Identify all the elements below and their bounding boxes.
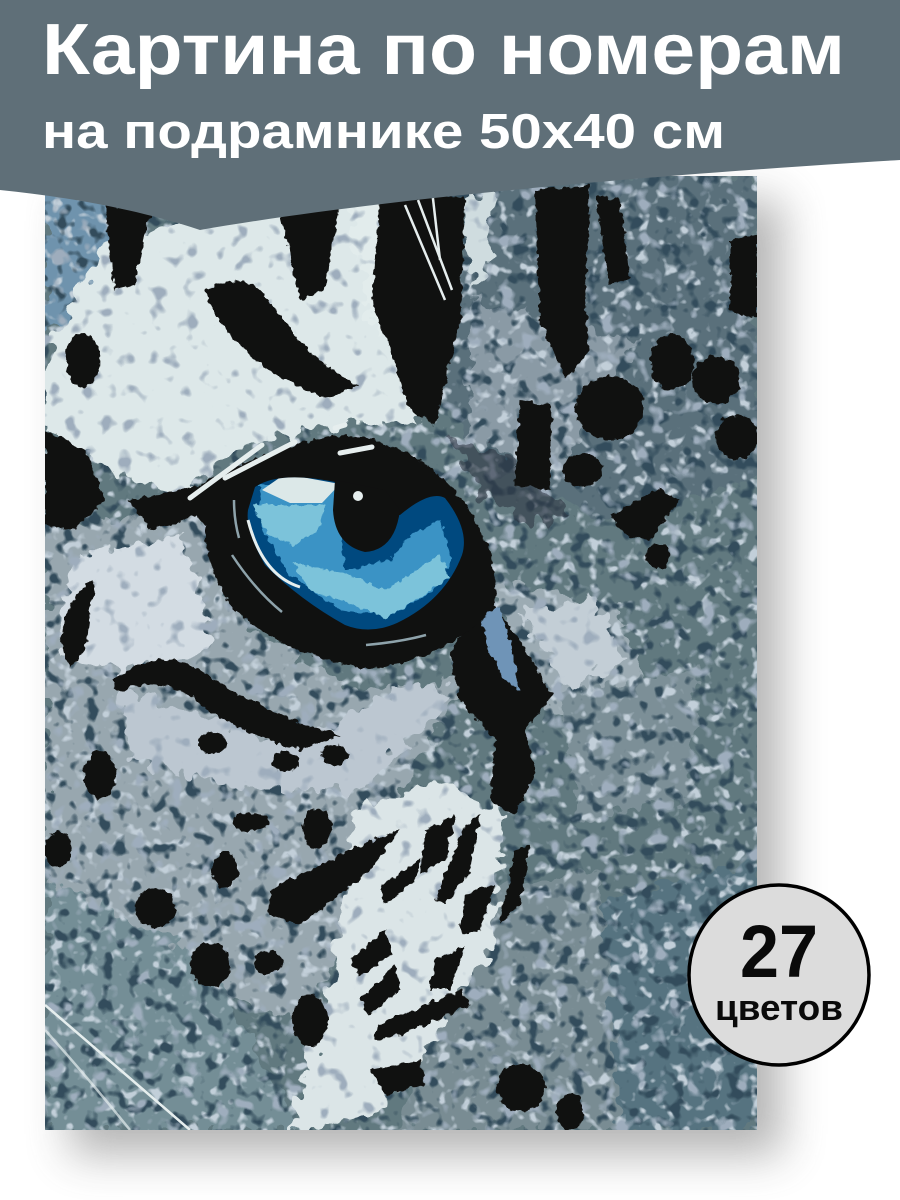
grey mottling over the highlights [45,176,757,1130]
blue iris [248,477,464,630]
tear line [450,600,552,815]
fur colour regions [45,176,757,1130]
subtitle: на подрамнике 50х40 см [42,105,725,159]
white fur highlights [45,196,625,1130]
badge number: 27 [740,910,818,993]
painting: snow leopard eye [44,176,759,1130]
header banner [0,0,900,230]
black fur markings [44,185,759,1130]
pupil [333,480,400,552]
badge label: цветов [715,987,843,1028]
canvas drop shadow [70,200,782,1155]
eye glint [353,491,363,501]
whisker lines [45,190,452,1130]
fur speckle texture [45,176,757,1130]
dark brow patch [450,440,570,525]
eye and tear duct [180,425,552,815]
brow highlights [190,425,372,498]
badge: 27 colours [689,885,869,1065]
eye rim lines [232,500,426,645]
black eye socket [180,435,496,668]
title: Картина по номерам [42,10,845,90]
